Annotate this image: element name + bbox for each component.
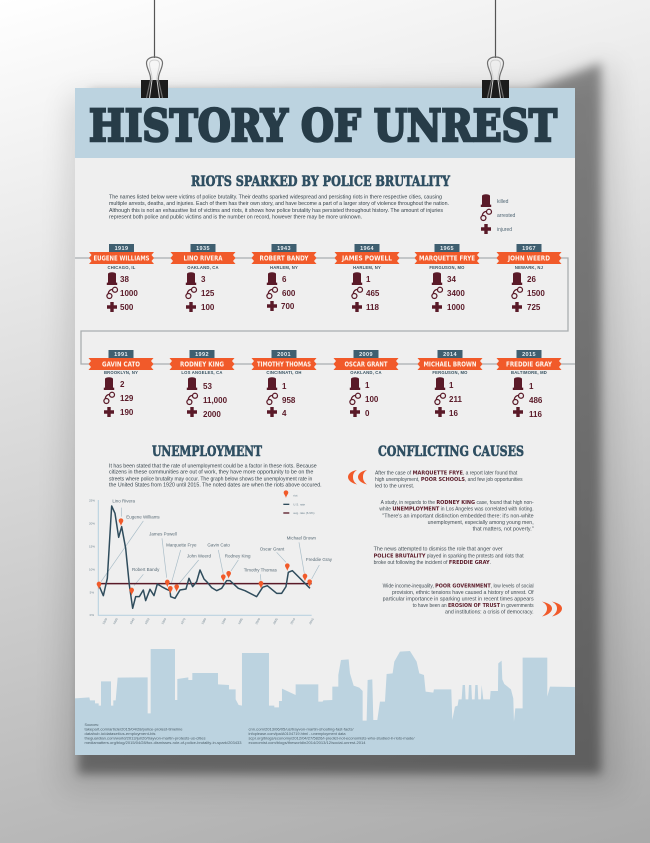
legend: icons: arrested xyxy=(497,213,516,219)
card: Michael Brown: 1 xyxy=(449,381,454,390)
card: Michael Brown: 211 xyxy=(449,395,462,404)
card: John Weerd: JOHN WEERD xyxy=(507,254,550,262)
city skyline xyxy=(75,649,575,755)
card: Michael Brown xyxy=(418,350,482,418)
card: Oscar Grant: 1 xyxy=(365,381,370,390)
riot labels: John Weerd xyxy=(187,553,212,558)
heading: riots: RIOTS SPARKED BY POLICE BRUTALITY xyxy=(191,174,450,190)
riot labels: Oscar Grant xyxy=(260,546,285,551)
card: Eugene Williams: CHICAGO, IL xyxy=(107,265,136,270)
conflicting causes text xyxy=(374,470,534,616)
paragraph: income inequality: Wide income-inequality, POOR GOVERNMENT, low levels of social xyxy=(383,583,534,589)
card: Timothy Thomas: 2001 xyxy=(277,352,291,358)
card: Rodney King: RODNEY KING xyxy=(180,360,224,368)
card: John Weerd xyxy=(496,244,562,312)
card: Robert Bandy: 1943 xyxy=(277,246,291,252)
card: Freddie Gray: BALTIMORE, MD xyxy=(511,370,547,375)
riot labels: Freddie Gray xyxy=(306,557,333,562)
y axis labels: 25% xyxy=(89,499,95,503)
card: Freddie Gray: 116 xyxy=(529,410,542,419)
card: Rodney King: 53 xyxy=(203,382,212,391)
card: Lino Rivera: 3 xyxy=(201,275,206,284)
card: Robert Bandy: 700 xyxy=(281,302,295,311)
card: Michael Brown: MICHAEL BROWN xyxy=(424,360,477,368)
x axis labels: 1920 xyxy=(101,617,108,625)
card: Lino Rivera: 125 xyxy=(201,289,215,298)
poster shadow xyxy=(62,62,620,790)
chart legend: U.S. rate xyxy=(293,502,305,506)
leader lines xyxy=(101,508,319,586)
heading: unemployment: UNEMPLOYMENT xyxy=(152,444,262,460)
card: Michael Brown: FERGUSON, MO xyxy=(432,370,468,375)
card: Robert Bandy: 600 xyxy=(282,289,296,298)
card: James Powell: HARLEM, NY xyxy=(353,265,381,270)
card: Eugene Williams: EUGENE WILLIAMS xyxy=(94,254,150,262)
x axis labels: 2010 xyxy=(289,617,296,625)
x axis labels: 1960 xyxy=(160,617,167,625)
card: Marquette Frye: FERGUSON, MO xyxy=(429,265,465,270)
paragraph: Marquette Frye: After the case of MARQUETTE FRYE, a report later found that xyxy=(375,470,518,476)
card: Lino Rivera: 100 xyxy=(201,303,215,312)
card: Rodney King: 2000 xyxy=(203,410,221,419)
x axis labels: 1940 xyxy=(129,617,136,625)
card: James Powell: 1 xyxy=(366,275,371,284)
x axis labels xyxy=(101,617,315,625)
hanging clip left xyxy=(141,0,168,98)
sources: cnn.com/2013/06/05/us/trayvon-martin-shooting-fast-facts/ xyxy=(248,728,355,732)
paragraph: Rodney King: that matters, not poverty." xyxy=(473,527,534,533)
riot labels: Eugene Williams xyxy=(126,514,160,519)
x axis labels: 1930 xyxy=(112,617,119,625)
card: Lino Rivera: LINO RIVERA xyxy=(184,254,223,262)
paragraph: income inequality: provision, ethnic tensions have caused a history of unrest. Of xyxy=(392,590,534,596)
heading: conflicting causes: CONFLICTING CAUSES xyxy=(378,444,524,460)
y axis labels: 5% xyxy=(90,590,94,594)
unemployment text xyxy=(109,463,322,489)
card: Timothy Thomas: 4 xyxy=(282,409,287,418)
card: John Weerd: NEWARK, NJ xyxy=(515,265,544,270)
card: Freddie Gray: 486 xyxy=(529,396,543,405)
card: Eugene Williams: 38 xyxy=(120,275,129,284)
x axis labels: 1950 xyxy=(144,617,151,625)
unemployment text: citizens in these communities are out of work, they have more opportunity to be on the xyxy=(109,470,313,476)
timeline connector xyxy=(75,258,575,364)
card: Timothy Thomas: 958 xyxy=(282,396,296,405)
x axis labels: 1990 xyxy=(220,617,227,625)
card: Lino Rivera xyxy=(170,244,236,312)
chart legend xyxy=(283,490,315,515)
hanging clip right xyxy=(482,0,509,98)
card: Robert Bandy xyxy=(252,244,316,311)
intro text: Although this is not an exhaustive list of victims and riots, it shows how police brutality has persisted throughout history. The amount of injuries xyxy=(109,208,443,214)
paragraph: Marquette Frye xyxy=(375,470,523,489)
chart legend: avg. rate (6.9%) xyxy=(293,511,315,515)
paragraph: Freddie Gray xyxy=(374,547,524,566)
riot labels xyxy=(112,498,333,573)
card: Rodney King: LOS ANGELES, CA xyxy=(181,370,223,375)
card: Freddie Gray: 1 xyxy=(529,382,534,391)
card: Oscar Grant: 2009 xyxy=(359,352,373,358)
y axis labels: 0% xyxy=(90,613,94,617)
sources: takepart.com/article/2015/04/28/police-protest-timeline xyxy=(84,728,182,732)
paragraph: Rodney King: unemployment, especially among young men, xyxy=(428,520,534,526)
card: Robert Bandy: 6 xyxy=(282,275,287,284)
sources: Sources: xyxy=(84,723,99,727)
card: Freddie Gray: 2015 xyxy=(522,352,536,358)
riot markers xyxy=(97,518,312,595)
sources xyxy=(84,723,416,745)
line chart: unemployment rate xyxy=(89,490,333,625)
paragraph: income inequality: particular importance in sparking unrest in recent times appears xyxy=(383,597,534,603)
legend: icons: injured xyxy=(497,227,512,233)
card: John Weerd: 1500 xyxy=(527,289,545,298)
y axis labels: 15% xyxy=(89,544,95,548)
card: Rodney King: 11,000 xyxy=(203,396,228,405)
card: Gavin Cato: GAVIN CATO xyxy=(102,360,140,368)
card: Gavin Cato: BROOKLYN, NY xyxy=(104,370,138,375)
card: James Powell: 1964 xyxy=(360,246,374,252)
riot labels: Timothy Thomas xyxy=(244,568,278,573)
card: Marquette Frye xyxy=(414,244,480,312)
card: James Powell xyxy=(334,244,400,312)
card: James Powell: JAMES POWELL xyxy=(341,254,392,262)
card: Gavin Cato: 2 xyxy=(120,380,125,389)
x axis labels: 2005 xyxy=(272,617,279,625)
sources: scpr.org/blogs/economy/2012/04/27/5826/i-predict-not-economists-who-studied-lr-riots-made/ xyxy=(248,736,416,740)
title: HISTORY OF UNREST xyxy=(89,101,557,152)
card: Oscar Grant: 100 xyxy=(365,395,379,404)
card: Rodney King xyxy=(170,350,234,419)
unemployment text: the United States from 1920 until 2015. The noted dates are when the riots above occured. xyxy=(109,483,322,489)
card: John Weerd: 725 xyxy=(527,303,541,312)
paragraph: Freddie Gray: The news attempted to dismiss the role that anger over xyxy=(374,547,503,553)
card: Timothy Thomas: CINCINNATI, OH xyxy=(266,370,302,375)
card: Oscar Grant: OAKLAND, CA xyxy=(350,370,382,375)
x axis labels: 2015 xyxy=(308,617,315,625)
card: Freddie Gray xyxy=(496,350,562,419)
x axis labels: 2000 xyxy=(254,617,261,625)
intro text: represent both police and public victims and is the number on record, however there may be more unknown. xyxy=(109,214,362,220)
card: Eugene Williams xyxy=(89,244,154,312)
sources: infoplease.com/ipa/A0104719.html - unemployment data xyxy=(248,732,346,736)
card: James Powell: 118 xyxy=(366,303,379,312)
paragraph: Rodney King: A study, in regards to the RODNEY KING case, found that high non- xyxy=(381,500,534,506)
card: Timothy Thomas: TIMOTHY THOMAS xyxy=(257,360,311,368)
card: Eugene Williams: 500 xyxy=(120,303,134,312)
card: Oscar Grant xyxy=(334,350,398,418)
icon: opening quote xyxy=(348,470,367,484)
paragraph: Rodney King: white UNEMPLOYMENT in Los Angeles was correlated with rioting. xyxy=(379,507,534,513)
paragraph: Freddie Gray: POLICE BRUTALITY played in sparking the protests and riots that xyxy=(374,553,524,559)
card: John Weerd: 26 xyxy=(527,275,536,284)
card: Lino Rivera: 1935 xyxy=(196,246,210,252)
x axis labels: 1995 xyxy=(237,617,244,625)
card: Michael Brown: 16 xyxy=(449,409,458,418)
sources: datahub.io/dataset/us-employment-bls xyxy=(84,732,156,736)
card: Freddie Gray: FREDDIE GRAY xyxy=(506,360,553,368)
riot labels: Gavin Cato xyxy=(207,543,230,548)
card: Marquette Frye: 1965 xyxy=(440,246,454,252)
chart legend: riot xyxy=(293,493,298,497)
intro text: multiple arrests, deaths, and injuries. Each of them has their own story, and have become a part of a larger story of violence throughout the nation. xyxy=(109,201,449,207)
card: Rodney King: 1992 xyxy=(195,352,209,358)
paragraph: Marquette Frye: led to the unrest. xyxy=(375,483,414,489)
sources: mediamatters.org/blog/2015/04/28/fox-dismisses-role-of-police-brutality-in-spark/203433 xyxy=(84,741,242,745)
card: Oscar Grant: 0 xyxy=(365,409,370,418)
intro text xyxy=(109,194,449,220)
card: Gavin Cato xyxy=(88,350,154,417)
paragraph: Rodney King xyxy=(379,500,534,533)
card: Eugene Williams: 1919 xyxy=(115,246,128,252)
card: Marquette Frye: MARQUETTE FRYE xyxy=(419,254,475,262)
riot labels: Marquette Frye xyxy=(166,543,197,548)
sources: theguardian.com/world/2013/jul/20/trayvon-martin-protests-us-cities xyxy=(84,736,206,740)
x axis labels: 1970 xyxy=(180,617,187,625)
unemployment line xyxy=(98,506,310,608)
riot labels: Robert Bandy xyxy=(132,567,160,572)
card: Marquette Frye: 3400 xyxy=(447,289,465,298)
card: Eugene Williams: 1000 xyxy=(120,289,138,298)
legend: icons xyxy=(481,194,516,234)
card: Oscar Grant: OSCAR GRANT xyxy=(344,360,388,368)
paragraph: Marquette Frye: high unemployment, POOR SCHOOLS, and few job opportunities xyxy=(375,477,523,483)
intro text: The names listed below were victims of police brutality. Their deaths sparked widespread and persisting riots in there respective cities, causing xyxy=(109,194,442,200)
card: Marquette Frye: 34 xyxy=(447,275,456,284)
riot labels: Lino Rivera xyxy=(112,498,136,503)
paragraph: income inequality: and institutions: a crisis of democracy. xyxy=(445,610,534,616)
paragraph: Rodney King: "There's an important distinction embedded there: it's non-white xyxy=(382,513,534,519)
card: Timothy Thomas xyxy=(252,350,316,418)
card: Michael Brown: 2014 xyxy=(443,352,457,358)
card: Timothy Thomas: 1 xyxy=(282,382,287,391)
card: Lino Rivera: OAKLAND, CA xyxy=(187,265,219,270)
card: John Weerd: 1967 xyxy=(522,246,536,252)
riot labels: Michael Brown xyxy=(287,535,317,540)
sources: economist.com/blogs/theworldin2014/2013/12/social-unrest-2014 xyxy=(248,741,366,745)
legend: icons: killed xyxy=(497,199,509,205)
card: Robert Bandy: HARLEM, NY xyxy=(270,265,298,270)
card: James Powell: 465 xyxy=(366,289,380,298)
title band xyxy=(75,88,575,158)
card: Gavin Cato: 190 xyxy=(120,408,134,417)
paragraph: Freddie Gray: broke out following the incident of FREDDIE GRAY. xyxy=(374,560,491,566)
card: Gavin Cato: 1991 xyxy=(114,352,128,358)
paragraph: income inequality xyxy=(383,583,534,616)
y axis labels: 20% xyxy=(89,521,95,525)
unemployment text: streets where police brutality may occur. The graph below shows the unemployment rate in xyxy=(109,476,312,482)
x axis labels: 1980 xyxy=(200,617,207,625)
card: Robert Bandy: ROBERT BANDY xyxy=(260,254,309,262)
riot labels: Rodney King xyxy=(225,553,251,558)
chart axes xyxy=(98,500,312,615)
card: Marquette Frye: 1000 xyxy=(447,303,465,312)
y axis labels xyxy=(89,499,95,617)
icon: closing quote xyxy=(542,602,562,616)
poster sheet xyxy=(75,88,575,755)
riot labels: James Powell xyxy=(149,532,177,537)
paragraph: income inequality: to have been an EROSION OF TRUST in governments xyxy=(413,603,534,609)
y axis labels: 10% xyxy=(89,567,95,571)
card: Gavin Cato: 129 xyxy=(120,394,134,403)
unemployment text: It has been stated that the rate of unemployment could be a factor in these riots. Because xyxy=(109,463,317,469)
average rate line xyxy=(98,581,312,586)
